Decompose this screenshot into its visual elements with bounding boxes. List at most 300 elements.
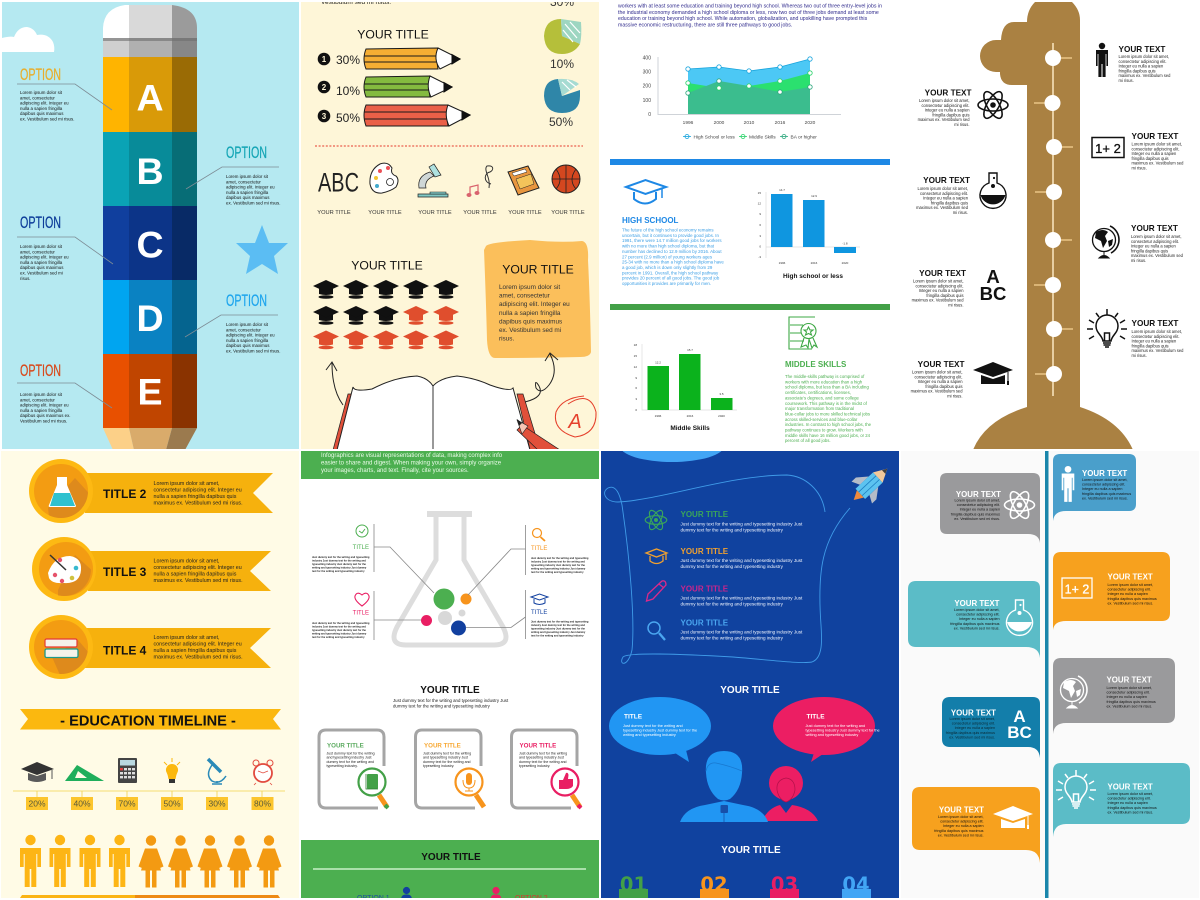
area chart: BA or higher	[790, 134, 817, 140]
middle skills text: across skilled-services and blue-collar	[785, 417, 858, 422]
high school text: with no more than high school diploma, but that	[622, 244, 715, 249]
option body text: amet, consectetur	[226, 179, 261, 184]
high school text: 27 percent (2.9 million) of young workers ages	[622, 254, 713, 259]
ribbon: title 4: maximus ex. Vestibulum sed mi risus.	[154, 654, 243, 660]
squiggle frame	[605, 475, 850, 663]
ribbon: title 4: nulla a sapien fringilla dapibus quis	[154, 648, 237, 654]
ribbon: title 3	[32, 537, 271, 601]
bubble: ABC: consectetur adipiscing elit.	[952, 722, 995, 726]
high school text: a good job, which is down only slightly from 29	[622, 265, 713, 270]
callout text: industry Just dummy text for the writing and	[312, 624, 366, 628]
panel: pathways to good jobs	[601, 2, 899, 449]
bubble: one plus two: Lorem ipsum dolor sit amet,	[1108, 583, 1153, 587]
speech bubble: pink: writing and typesetting industry	[806, 733, 858, 737]
callout text: industry Just dummy text for the writing and	[531, 623, 585, 627]
center line	[1045, 451, 1048, 898]
open book	[333, 376, 540, 450]
callout text: Just dummy text for the writing and typesetting	[531, 620, 589, 624]
bubble: light bulb: YOUR TEXT	[1108, 782, 1153, 792]
bar chart: middle skills: 18	[634, 343, 637, 347]
men pictogram	[20, 835, 130, 887]
bar chart: high school or less: 1996	[779, 261, 786, 265]
card: book: dummy text for the writing and	[326, 760, 374, 764]
bubble: ABC	[942, 697, 1040, 758]
timeline axis	[13, 791, 285, 797]
bar chart: high school or less: 2016	[811, 261, 818, 265]
callout note: nulla a sapien fringilla	[499, 310, 561, 317]
numbered tabs: 04	[842, 873, 870, 896]
option body text: amet, consectetur	[20, 397, 55, 402]
timeline icons	[21, 758, 273, 785]
left text blocks: YOUR TEXT	[923, 176, 970, 185]
bar chart: middle skills: 9	[635, 376, 637, 380]
connector lines	[374, 524, 526, 640]
option body text: Lorem ipsum dolor sit	[226, 322, 269, 327]
bubble: ABC: Integer eu nulla a sapien	[955, 726, 995, 730]
list text: dummy text for the writing and typesetting industry	[680, 601, 784, 606]
callout text: industry Just dummy text for the writing and	[531, 560, 585, 564]
icon: ABC: BC	[980, 283, 1006, 304]
option body text: Lorem ipsum dolor sit	[226, 174, 269, 179]
callout text: text for the writing and typesetting industry	[531, 634, 584, 638]
pencil bar: 30%: 30%	[336, 53, 360, 67]
left text blocks: mi risus.	[954, 122, 970, 127]
bar chart: middle skills: 15	[634, 354, 637, 358]
bubble: atom	[940, 473, 1040, 543]
left text blocks: fringilla dapibus quis	[925, 384, 962, 389]
timeline percent labels: 20%	[28, 798, 46, 808]
bubble: ABC: fringilla dapibus quis maximus	[946, 731, 995, 735]
ribbon: title 4: TITLE 4	[103, 644, 147, 658]
list icons	[645, 508, 667, 640]
card: microphone: dummy text for the writing and	[423, 760, 471, 764]
callout note: dapibus quis maximus	[499, 318, 562, 325]
speech bubble: blue: typesetting industry Just dummy text for the	[623, 729, 697, 733]
right text blocks: Integer eu nulla a sapien	[1132, 151, 1177, 156]
callout icons	[355, 525, 548, 606]
card: microphone: typesetting industry.	[423, 764, 454, 768]
icon: star	[236, 225, 288, 274]
callout text: text for the writing and typesetting industry	[531, 570, 584, 574]
callout note: ex. Vestibulum sed mi	[499, 327, 561, 334]
subject labels	[317, 210, 584, 214]
bar chart: middle skills: 1996	[655, 414, 662, 418]
option body text: ex. Vestibulum sed mi	[20, 270, 63, 276]
right text blocks: maximus ex. Vestibulum sed	[1131, 253, 1184, 258]
left text blocks: consectetur adipiscing elit.	[915, 283, 964, 288]
pencil bar: 10%: 10%	[336, 84, 360, 98]
callout note: adipiscing elit. Integer eu	[499, 301, 570, 308]
right text blocks: consectetur adipiscing elit.	[1118, 59, 1167, 64]
bubble: flask: Lorem ipsum dolor sit amet,	[954, 608, 1000, 612]
bar chart: high school or less: 15	[758, 191, 761, 195]
numbered tabs	[619, 873, 871, 898]
ribbon: title 2: TITLE 2	[103, 487, 147, 501]
list text	[680, 522, 803, 640]
card: thumbs up: and typesetting industry Just	[519, 756, 564, 760]
bar chart: middle skills: 12	[634, 365, 637, 369]
numbered tabs: 03	[771, 873, 798, 896]
middle skills text: pathway continues to grow. Workers with	[785, 428, 863, 432]
callout text	[312, 555, 589, 639]
left text blocks: Lorem ipsum dolor sit amet,	[919, 98, 970, 103]
icon: certificate	[789, 317, 817, 349]
header band: your images, charts, and text. Finally, cite your sources.	[321, 468, 469, 474]
bubble: light bulb: Lorem ipsum dolor sit amet,	[1108, 792, 1153, 796]
dotted divider	[315, 146, 583, 147]
right text blocks: Lorem ipsum dolor sit amet,	[1132, 329, 1182, 334]
ribbon: title 3: nulla a sapien fringilla dapibus quis	[154, 571, 237, 577]
ribbon: title 2	[29, 459, 273, 525]
right text blocks: fringilla dapibus quis	[1118, 68, 1156, 73]
subtitle: Just dummy text for the writing and typesetting industry Just	[393, 698, 509, 703]
callout text: industry Just dummy text for the writing and	[312, 558, 366, 562]
heading banner: - EDUCATION TIMELINE -	[60, 714, 236, 730]
drawing pencil	[517, 419, 560, 450]
heading banner	[20, 709, 281, 730]
left text blocks: Integer eu nulla a sapien	[918, 379, 963, 384]
right text blocks: consectetur adipiscing elit.	[1132, 334, 1180, 339]
bubble: mortarboard	[912, 787, 1040, 863]
footer band: YOUR TITLE	[421, 852, 481, 863]
pencil bar: 10%: 2	[322, 83, 327, 92]
bubble: mortarboard: ex. Vestibulum sed mi risus.	[938, 833, 984, 837]
right text blocks: maximus ex. Vestibulum sed	[1132, 348, 1184, 353]
pencil letters: D	[136, 297, 164, 339]
speech bubble: blue: Just dummy text for the writing and	[623, 724, 683, 728]
bubble: ABC: A	[1013, 707, 1026, 726]
middle skills text: certificates, certifications, licenses,	[785, 390, 851, 395]
bubble: light bulb: ex. Vestibulum sed mi risus.	[1108, 810, 1153, 814]
bubble: flask: Integer eu nulla a sapien	[959, 617, 1000, 621]
right text blocks: consectetur adipiscing elit.	[1132, 146, 1180, 151]
list text: Just dummy text for the writing and typesetting industry Just	[680, 596, 803, 600]
option body text: risus.	[20, 276, 30, 281]
high school text: uncertain, but it continues to provide good jobs. In	[622, 233, 719, 238]
callout titles	[353, 545, 547, 616]
list items: YOUR TITLE	[680, 618, 729, 628]
icon: cloud	[2, 27, 54, 52]
option body text: Lorem ipsum dolor sit	[20, 244, 63, 249]
area chart: 300	[643, 70, 651, 76]
option body text: dapibus quis maximus ex.	[20, 413, 71, 418]
numbered tabs: 01	[620, 873, 647, 896]
option body text: nulla a sapien fringilla	[20, 260, 63, 265]
option body text: amet, consectetur	[20, 249, 55, 254]
header band	[301, 451, 599, 479]
option body text: adipiscing elit. Integer eu	[226, 333, 275, 338]
numbered tabs: 02	[700, 873, 728, 896]
card: thumbs up: typesetting industry.	[519, 764, 550, 768]
title: YOUR TITLE	[720, 685, 780, 696]
callout note: risus.	[499, 336, 514, 343]
option body text: ex. Vestibulum sed mi risus.	[226, 200, 280, 206]
bubble: globe: Integer eu nulla a sapien	[1106, 695, 1147, 699]
bar chart: middle skills: 12.2	[655, 360, 661, 364]
bubble: light bulb: consectetur adipiscing elit.	[1108, 797, 1151, 801]
ribbon: title 4	[29, 615, 271, 680]
ribbon: title 2: nulla a sapien fringilla dapibus quis	[154, 494, 237, 500]
card: microphone: and typesetting industry Just	[423, 756, 468, 760]
bubble: person: Integer eu nulla a sapien	[1082, 487, 1122, 491]
timeline percent labels: 30%	[208, 798, 226, 808]
bar chart: middle skills: 15.7	[687, 348, 693, 352]
bubble: person	[1053, 454, 1136, 521]
icon: ABC	[980, 266, 1006, 304]
icon: mortarboard	[973, 362, 1013, 385]
pencil bar: 50%	[318, 105, 470, 126]
speech bubble: pink	[773, 697, 880, 762]
middle skills text: major transformation from traditional	[785, 406, 854, 411]
speech bubble: pink: TITLE	[806, 714, 825, 720]
card: book: YOUR TITLE	[327, 742, 364, 750]
right text blocks: YOUR TEXT	[1118, 45, 1165, 54]
left text blocks: fringilla dapibus quis	[931, 200, 968, 205]
bubble: person: Lorem ipsum dolor sit amet,	[1082, 478, 1128, 482]
option body text: dapibus quis maximus	[226, 343, 270, 348]
header band: Infographics are visual representations of data, making complex info	[321, 453, 503, 459]
subject labels: YOUR TITLE	[418, 210, 452, 216]
grade mark	[555, 396, 596, 437]
leader lines	[17, 84, 279, 408]
left text blocks: Lorem ipsum dolor sit amet,	[913, 278, 964, 284]
card: thumbs up: YOUR TITLE	[520, 742, 556, 750]
left text blocks: mi risus.	[948, 302, 964, 308]
callout titles: TITLE	[353, 545, 369, 551]
card: book	[319, 730, 388, 808]
right text blocks: Lorem ipsum dolor sit amet,	[1131, 234, 1182, 239]
pencil letters	[138, 85, 163, 404]
left text blocks: maximus ex. Vestibulum sed	[918, 117, 970, 122]
option body text: ex. Vestibulum sed mi risus.	[226, 348, 280, 354]
area chart: 200	[643, 84, 651, 90]
bubble: globe: ex. Vestibulum sed mi risus.	[1106, 704, 1152, 708]
bar chart: high school or less: 2020	[842, 261, 849, 265]
intro text: massive economic restructuring, there are still three pathways to good jobs.	[618, 22, 792, 28]
left text blocks: consectetur adipiscing elit.	[921, 103, 970, 108]
timeline percent labels: 70%	[118, 798, 136, 808]
pencil letters: A	[136, 76, 164, 118]
bubble: flask: ex. Vestibulum sed mi risus.	[954, 626, 1000, 630]
rocket	[843, 458, 898, 511]
right text blocks: fringilla dapibus quis	[1132, 343, 1169, 348]
ratio bar	[20, 895, 280, 898]
option body text: dapibus quis maximus	[20, 265, 64, 270]
callout text: Just dummy text for the writing and typesetting	[312, 621, 370, 625]
bar chart: high school or less: 0	[759, 244, 761, 248]
right text blocks: Integer eu nulla a sapien	[1131, 244, 1177, 249]
ribbon: title 4: Lorem ipsum dolor sit amet,	[154, 635, 219, 641]
right text blocks: fringilla dapibus quis	[1131, 248, 1168, 253]
timeline percent labels: 80%	[254, 798, 271, 808]
title: YOUR TITLE	[357, 28, 429, 42]
bubble: flask: consectetur adipiscing elit.	[956, 613, 1000, 617]
header band: easier to share and digest. When making your own, simply organize	[321, 460, 502, 466]
ribbon: title 3: TITLE 3	[103, 565, 147, 579]
callout note: Lorem ipsum dolor sit	[499, 284, 560, 291]
bubble: globe: YOUR TEXT	[1106, 676, 1152, 684]
middle skills text	[785, 374, 872, 443]
bubble: globe	[1053, 658, 1175, 734]
left text blocks: mi risus.	[953, 210, 968, 215]
option body text: Vestibulum sed mi risus.	[20, 418, 67, 424]
right text blocks: maximus ex. Vestibulum sed	[1132, 161, 1184, 166]
bar chart: high school or less: 12	[758, 202, 761, 206]
ribbon: title 2: consectetur adipiscing elit. Integer eu	[154, 487, 242, 493]
middle skills text: percent of all good jobs.	[785, 438, 831, 443]
pencil letters: B	[136, 150, 164, 192]
high school text: The future of the high school economy remains	[622, 228, 714, 232]
high school text: percent in 1991. Overall, the high school pathway	[622, 270, 719, 275]
icon: light bulb	[1087, 309, 1127, 347]
pencil bar: 30%	[318, 48, 460, 69]
top arc	[620, 430, 724, 462]
left text blocks: consectetur adipiscing elit.	[920, 191, 968, 196]
area chart: 400	[643, 56, 651, 62]
option headings: OPTION	[226, 292, 267, 310]
bar chart: high school or less	[758, 188, 860, 280]
bubble: ABC: BC	[1007, 723, 1032, 742]
subject labels: YOUR TITLE	[368, 210, 402, 216]
left text blocks: consectetur adipiscing elit.	[914, 374, 962, 379]
icon: globe	[1092, 226, 1119, 258]
arrows	[326, 353, 558, 405]
list text: Just dummy text for the writing and typesetting industry Just	[680, 630, 803, 634]
right text blocks: YOUR TEXT	[1132, 132, 1178, 141]
middle skills text: workers with more education than a high	[785, 379, 863, 384]
bubble: flask: fringilla dapibus quis maximus	[950, 622, 1000, 626]
bubble: globe: Lorem ipsum dolor sit amet,	[1106, 686, 1152, 690]
right text blocks: mi risus.	[1118, 78, 1134, 83]
bubble: one plus two: 1+ 2	[1065, 582, 1089, 596]
title: YOUR TITLE	[721, 845, 781, 856]
brown tree shape	[973, 2, 1133, 450]
option headings: OPTION	[226, 144, 267, 162]
bar chart: middle skills: 2016	[687, 414, 694, 418]
callout text: writing and typesetting industry Just dummy	[312, 632, 367, 636]
option headings: OPTION	[20, 362, 61, 380]
icon: person	[1096, 43, 1108, 77]
icon: ABC: A	[986, 266, 1000, 287]
title: YOUR TITLE	[420, 685, 480, 696]
woman figure	[762, 766, 818, 821]
left text blocks: YOUR TEXT	[919, 269, 966, 278]
option headings	[20, 66, 267, 380]
left text blocks: maximus ex. Vestibulum sed	[911, 389, 963, 394]
callout text: text for the writing and typesetting industry	[312, 635, 365, 639]
option body text: Lorem ipsum dolor sit	[20, 90, 63, 95]
bar chart: high school or less: 6	[759, 223, 761, 227]
high school text: provides 20 percent of all good jobs. The good job	[622, 276, 720, 281]
pencil	[103, 5, 197, 450]
card: book: and typesetting industry Just	[326, 756, 371, 760]
timeline percent labels	[26, 797, 274, 810]
option body text: dapibus quis maximus	[226, 195, 270, 200]
bar chart: middle skills: 3.5	[719, 392, 724, 396]
right text blocks: Lorem ipsum dolor sit amet,	[1118, 54, 1169, 59]
bubble: one plus two: fringilla dapibus quis maximus	[1108, 597, 1157, 601]
left text blocks: Integer eu nulla a sapien	[925, 108, 970, 113]
speech bubble: pink: typesetting industry Just dummy text for the	[806, 729, 880, 733]
callout text: writing and typesetting industry Just dummy	[531, 566, 586, 570]
intro text	[618, 4, 882, 28]
bar chart: high school or less: -3	[758, 255, 761, 259]
pencil bar: 10%	[318, 76, 452, 98]
bubble: flask: YOUR TEXT	[954, 599, 1000, 608]
bar chart: high school or less: 9	[759, 212, 761, 216]
card: thumbs up: Just dummy text for the writing	[519, 752, 567, 756]
panel: flask infographic	[301, 451, 599, 900]
flask illustration	[394, 514, 506, 645]
bubble: atom: consectetur adipiscing elit.	[957, 503, 1000, 507]
callout text: text for the writing and typesetting industry	[312, 569, 365, 573]
callout text: writing and typesetting industry Just dummy	[531, 630, 586, 634]
panel: blue conversation	[601, 430, 899, 898]
card: microphone: Just dummy text for the writing	[423, 752, 471, 756]
callout titles: TITLE	[531, 546, 547, 552]
callout text: typesetting industry Just dummy text for the	[531, 563, 585, 567]
bubble: flask	[908, 581, 1040, 658]
high school text: opportunities it provides are primarily for men.	[622, 281, 711, 286]
area chart: 2020	[805, 120, 816, 126]
right text blocks: consectetur adipiscing elit.	[1131, 239, 1179, 244]
left text blocks: fringilla dapibus quis	[932, 112, 970, 117]
subject icons: ABC	[318, 168, 359, 198]
option body text: nulla a sapien fringilla	[20, 106, 63, 111]
bubble: person: consectetur adipiscing elit.	[1082, 483, 1125, 487]
green divider	[610, 304, 890, 310]
middle skills text: The middle-skills pathway is comprised of	[785, 374, 865, 379]
right text blocks: Lorem ipsum dolor sit amet,	[1132, 142, 1182, 146]
bubble: atom: Lorem ipsum dolor sit amet,	[954, 498, 1000, 502]
pie charts: 10%	[550, 57, 574, 71]
bubble: one plus two: consectetur adipiscing elit.	[1108, 588, 1151, 592]
area chart: High School or less	[694, 134, 735, 140]
list text: Just dummy text for the writing and typesetting industry Just	[680, 522, 803, 526]
bar chart: high school or less: 3	[759, 234, 761, 238]
ribbon: title 3: consectetur adipiscing elit. Integer eu	[154, 565, 242, 571]
heading: high school: HIGH SCHOOL	[622, 216, 679, 225]
ribbon: title 3: Lorem ipsum dolor sit amet,	[154, 558, 219, 564]
left text blocks: YOUR TEXT	[918, 360, 964, 369]
option body text: nulla a sapien fringilla	[226, 338, 269, 343]
bubble: one plus two: ex. Vestibulum sed mi risus.	[1108, 601, 1153, 605]
bubble: mortarboard: Integer eu nulla a sapien	[943, 824, 984, 828]
panel: speech bubble timeline	[901, 451, 1199, 898]
option body text	[20, 90, 280, 424]
high school text	[622, 228, 724, 286]
middle skills text: blue-collar jobs to more skilled technical jobs	[785, 411, 870, 416]
intro text: the industrial economy demanded a high school diploma or less, now two out of three jobs demand at least some	[618, 10, 879, 16]
card: thumbs up: dummy text for the writing and	[519, 760, 567, 764]
bubble: mortarboard: fringilla dapibus quis maximus	[934, 829, 984, 833]
callout text: Just dummy text for the writing and typesetting	[312, 555, 370, 559]
speech bubble: blue: writing and typesetting industry	[623, 733, 676, 737]
list text: dummy text for the writing and typesetting industry	[680, 527, 784, 532]
bubble: one plus two	[1053, 552, 1170, 630]
bar chart: middle skills: 0	[635, 408, 637, 412]
icon: graduation cap	[626, 180, 666, 204]
card: microphone: YOUR TITLE	[424, 742, 461, 750]
bubble: atom: ex. Vestibulum sed mi risus.	[954, 517, 1000, 521]
list items	[680, 510, 729, 628]
callout text: typesetting industry Just dummy text for the	[312, 562, 366, 566]
women pictogram	[138, 835, 282, 888]
option body text: adipiscing elit. Integer eu	[20, 403, 69, 408]
card: book: Just dummy text for the writing	[326, 752, 375, 756]
speech bubble: blue	[609, 697, 711, 762]
left text blocks: maximus ex. Vestibulum sed	[916, 205, 969, 210]
